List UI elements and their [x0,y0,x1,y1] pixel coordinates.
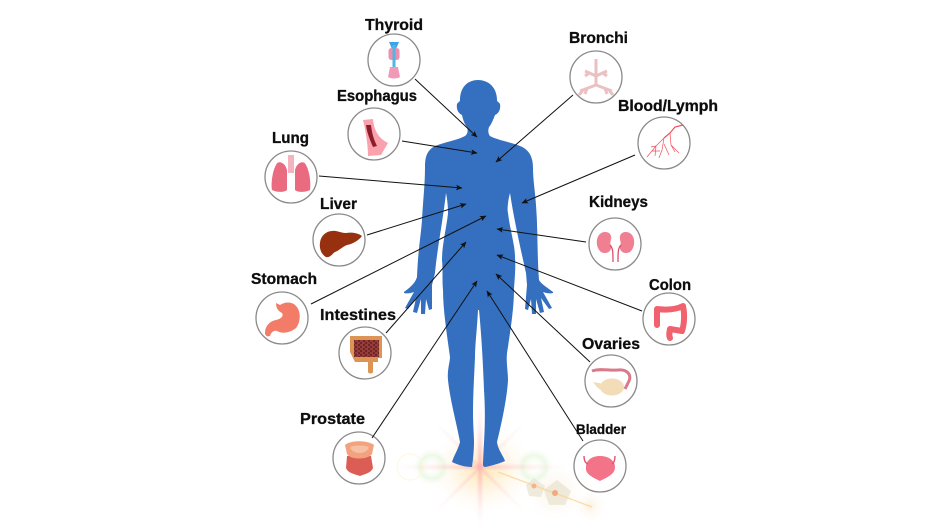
circle: stomach [256,292,308,344]
panel: prostate [300,281,477,484]
label: Bronchi: Bronchi [569,30,628,47]
label: Prostate: Prostate [300,411,365,428]
icon: kidneys [597,232,634,262]
circle: intestines [339,327,391,379]
circle: bronchi [570,51,622,103]
icon: ovary and tube [592,370,630,396]
arrow: liver [367,204,466,235]
arrow: bladder [487,291,583,441]
icon: esophagus [363,119,388,156]
arrow: intestines [386,242,466,333]
arrow: thyroid [415,79,477,137]
circle: prostate [333,432,385,484]
circle: esophagus [348,108,400,160]
icon: thyroid gland [388,42,400,78]
label: Ovaries: Ovaries [582,336,640,353]
icon: stomach [265,302,300,336]
arrow: blood [522,155,635,203]
panel: kidneys [497,194,648,270]
panel: bladder [487,291,627,492]
label: Colon: Colon [649,277,691,294]
arrow: colon [497,255,642,311]
icon: blood vessels [647,125,683,158]
circle: blood [638,117,690,169]
icon: intestines [350,336,382,374]
icon: colon [657,306,684,338]
circle: ovaries [585,355,637,407]
label: Kidneys: Kidneys [589,194,648,211]
panel: thyroid [365,17,477,137]
label: Intestines: Intestines [320,307,396,324]
panel: blood and lymph [522,98,718,203]
icon: prostate [345,441,374,476]
arrow: lung [319,176,462,188]
label: Bladder: Bladder [576,422,627,437]
panel: bronchi [496,30,628,162]
arrow: stomach [311,216,486,304]
label: Liver: Liver [320,196,357,213]
arrow: ovaries [496,274,590,362]
human body silhouette [404,80,553,467]
icon: liver [320,231,362,257]
panel: liver [313,196,466,266]
panel: ovaries [496,274,640,407]
panel: lung [265,130,462,203]
circle: colon [643,293,695,345]
panel: intestines [320,242,466,379]
panel: colon [497,255,695,345]
label: Stomach: Stomach [251,271,317,288]
label: Lung: Lung [272,130,309,147]
icon: bronchi [579,59,613,95]
label: Esophagus: Esophagus [337,88,417,105]
arrow: prostate [372,281,477,438]
circle: bladder [574,440,626,492]
label: Blood/Lymph: Blood/Lymph [618,98,718,115]
lens flare at feet [395,405,608,525]
circle: lung [265,151,317,203]
circle: thyroid [368,34,420,86]
circle: liver [313,214,365,266]
arrow: bronchi [496,95,573,162]
arrow: kidneys [497,229,586,242]
label: Thyroid: Thyroid [365,17,423,34]
circle: kidneys [589,218,641,270]
icon: bladder [584,456,615,481]
panel: stomach [251,216,486,344]
panel: esophagus [337,88,477,160]
icon: lungs [272,155,310,192]
arrow: esophagus [402,141,477,153]
